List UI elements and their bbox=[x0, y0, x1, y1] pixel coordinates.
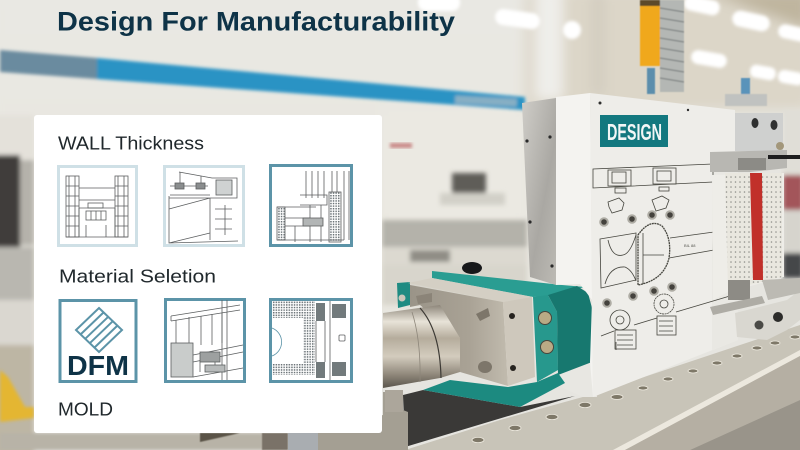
icon: DFM logo: DFM bbox=[67, 350, 129, 381]
overhead hoses bbox=[640, 0, 767, 106]
machine: clamp and red rod bbox=[710, 113, 800, 340]
panel: design guidelines bbox=[34, 115, 382, 433]
ceiling lights bbox=[418, 0, 800, 86]
heading: Material Seletion: Material Seletion bbox=[59, 266, 216, 286]
icon: material drawing 2 bbox=[166, 300, 244, 382]
machine: white block base bbox=[558, 362, 597, 397]
title: Design For Manufacturability bbox=[57, 6, 455, 36]
machine: white front panel with drawings bbox=[556, 93, 740, 397]
icon: DFM logo bbox=[60, 300, 136, 382]
heading: WALL Thickness: WALL Thickness bbox=[58, 132, 204, 154]
label: DESIGN bbox=[600, 115, 668, 147]
icon: material drawing 3 bbox=[270, 300, 352, 382]
table: steel surface with holes bbox=[403, 325, 800, 450]
machine: teal bracket and steel block bbox=[397, 262, 592, 407]
panel line drawings bbox=[593, 164, 740, 350]
machine: steel side plate bbox=[522, 98, 556, 285]
foreground below panel bbox=[0, 370, 408, 450]
machine: steel cylinder bbox=[383, 305, 460, 388]
blue overhead stripe bbox=[0, 50, 525, 110]
heading: MOLD: MOLD bbox=[58, 398, 113, 420]
machine: white front panel with drawings: BIL 88 bbox=[684, 243, 696, 248]
icon: wall section drawing 2 bbox=[164, 166, 244, 246]
icon: wall section drawing 1 bbox=[58, 166, 136, 246]
label: DESIGN: DESIGN bbox=[607, 119, 662, 145]
icon: wall section drawing 3 bbox=[270, 166, 352, 246]
panel bolts bbox=[600, 211, 676, 307]
